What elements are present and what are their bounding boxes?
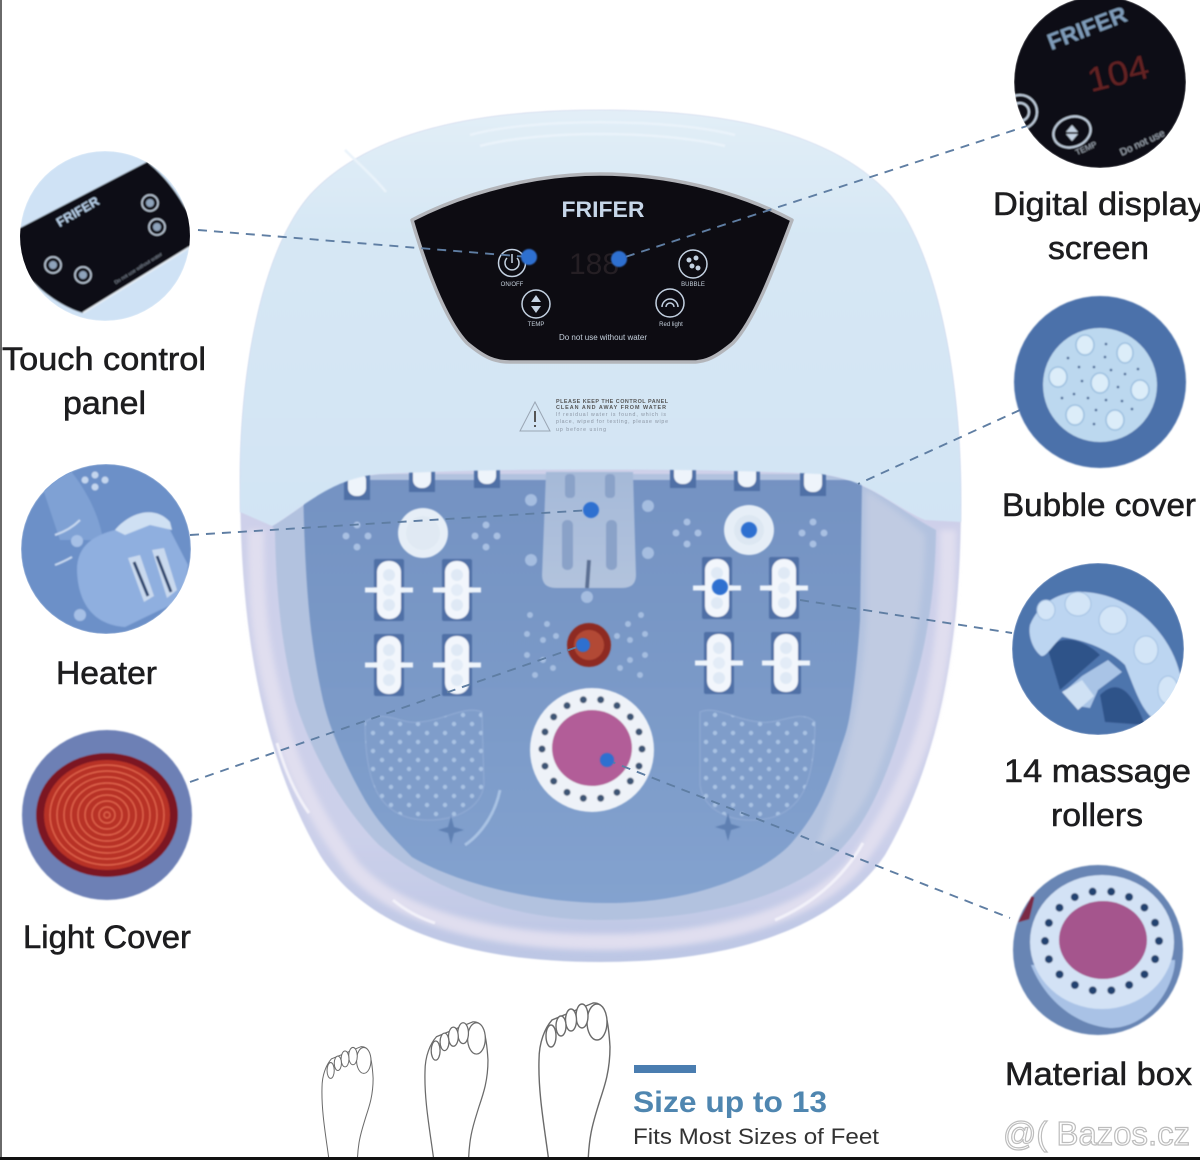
panel: light cover xyxy=(22,730,192,955)
bubble button xyxy=(679,250,707,288)
warning sticker: CLEAN AND AWAY FROM WATER xyxy=(556,405,666,411)
temp button: TEMP xyxy=(528,322,544,328)
detail circle: light cover xyxy=(22,730,192,900)
rim lighter band xyxy=(256,530,948,942)
watermark: @( Bazos.cz xyxy=(1003,1115,1190,1152)
detail circle: heater xyxy=(21,464,191,634)
label: light cover: Light Cover xyxy=(23,919,191,955)
leader line: bubble cover xyxy=(858,410,1020,484)
label: digital display screen: screen xyxy=(1048,230,1149,266)
panel: touch control panel xyxy=(2,151,206,421)
detail circle: bubble cover xyxy=(1014,296,1186,468)
leader line: heater xyxy=(190,510,591,535)
small foot xyxy=(322,1047,373,1160)
label: material box: Material box xyxy=(1005,1056,1192,1092)
warning sticker: If residual water is found, which is xyxy=(556,412,666,418)
label: massage rollers: 14 massage xyxy=(1004,753,1191,789)
material box xyxy=(530,688,654,812)
warning sticker: place, wiped for testing, please wipe xyxy=(556,419,668,425)
leader line: massage rollers xyxy=(800,600,1012,633)
leader line: light cover xyxy=(190,645,583,782)
on off button: ON/OFF xyxy=(501,282,524,288)
on off button xyxy=(498,250,526,288)
detail circle: digital display xyxy=(1003,0,1186,168)
label: touch control panel: Touch control xyxy=(2,341,206,377)
size callout xyxy=(633,1065,879,1149)
warning sticker: up before using xyxy=(556,427,606,433)
right inner wall xyxy=(815,490,925,850)
floor ridge highlight xyxy=(465,790,500,845)
massage floor details xyxy=(342,460,828,845)
foot size illustrations xyxy=(322,1003,610,1160)
detail circle: touch panel: FRIFER xyxy=(54,193,102,230)
red light button: Red light xyxy=(659,322,683,328)
callout markers xyxy=(521,249,757,767)
label: digital display screen: Digital display xyxy=(993,186,1200,222)
label: heater: Heater xyxy=(56,655,157,691)
massage rollers xyxy=(365,557,810,696)
detail circle: digital display: TEMP xyxy=(1074,140,1098,157)
spa body and rim xyxy=(240,110,961,962)
display digits: 188 xyxy=(569,248,619,281)
dot crosses xyxy=(342,518,828,550)
lid ridges xyxy=(345,122,735,192)
accent bar xyxy=(634,1065,696,1073)
detail circle: digital display: Do not use xyxy=(1118,128,1167,159)
detail circle: touch panel xyxy=(15,151,192,321)
red light button xyxy=(656,289,684,328)
floor stars xyxy=(438,813,741,844)
spa lid xyxy=(240,110,961,526)
label: touch control panel xyxy=(2,341,206,421)
detail circle: touch panel: Do not use without water xyxy=(114,252,164,286)
warning sticker xyxy=(520,399,669,433)
warning sticker: PLEASE KEEP THE CONTROL PANEL xyxy=(556,399,669,405)
detail circle: digital display: FRIFER xyxy=(1044,1,1131,55)
basin wall xyxy=(272,474,936,920)
panel warning: Do not use without water xyxy=(559,333,647,342)
medium foot xyxy=(425,1022,488,1160)
brand: FRIFER xyxy=(562,197,645,222)
rim highlights xyxy=(277,743,863,923)
control panel xyxy=(412,174,792,362)
panel: digital display screen xyxy=(993,0,1200,266)
leader line: touch control panel xyxy=(198,230,529,257)
dots around light xyxy=(524,612,648,678)
basin floor xyxy=(303,480,862,903)
leader line: digital display xyxy=(619,125,1030,259)
label: massage rollers xyxy=(1004,753,1191,833)
panel: massage rollers xyxy=(1004,563,1191,833)
label: touch control panel: panel xyxy=(63,385,146,421)
red light xyxy=(567,623,611,667)
bubble button: BUBBLE xyxy=(681,282,705,288)
product: foot spa xyxy=(240,110,961,962)
detail circle: massage roller xyxy=(1012,563,1184,735)
panel: material box xyxy=(1005,865,1192,1092)
label: bubble cover: Bubble cover xyxy=(1002,487,1196,523)
label: digital display screen xyxy=(993,186,1200,266)
temp button xyxy=(522,290,550,328)
leader line: material box xyxy=(607,760,1010,918)
panel: bubble cover xyxy=(1002,296,1196,523)
size subheading: Fits Most Sizes of Feet xyxy=(633,1124,879,1149)
detail circle: material box xyxy=(1013,865,1183,1035)
size heading: Size up to 13 xyxy=(633,1086,827,1119)
panel: heater xyxy=(21,464,191,691)
detail circle: digital display: 104 xyxy=(1084,48,1153,100)
foot pads xyxy=(365,710,815,820)
bubble discs xyxy=(398,505,774,558)
label: massage rollers: rollers xyxy=(1051,797,1143,833)
large foot xyxy=(539,1003,610,1160)
heater housing xyxy=(525,472,654,603)
top row nubs xyxy=(344,460,826,500)
